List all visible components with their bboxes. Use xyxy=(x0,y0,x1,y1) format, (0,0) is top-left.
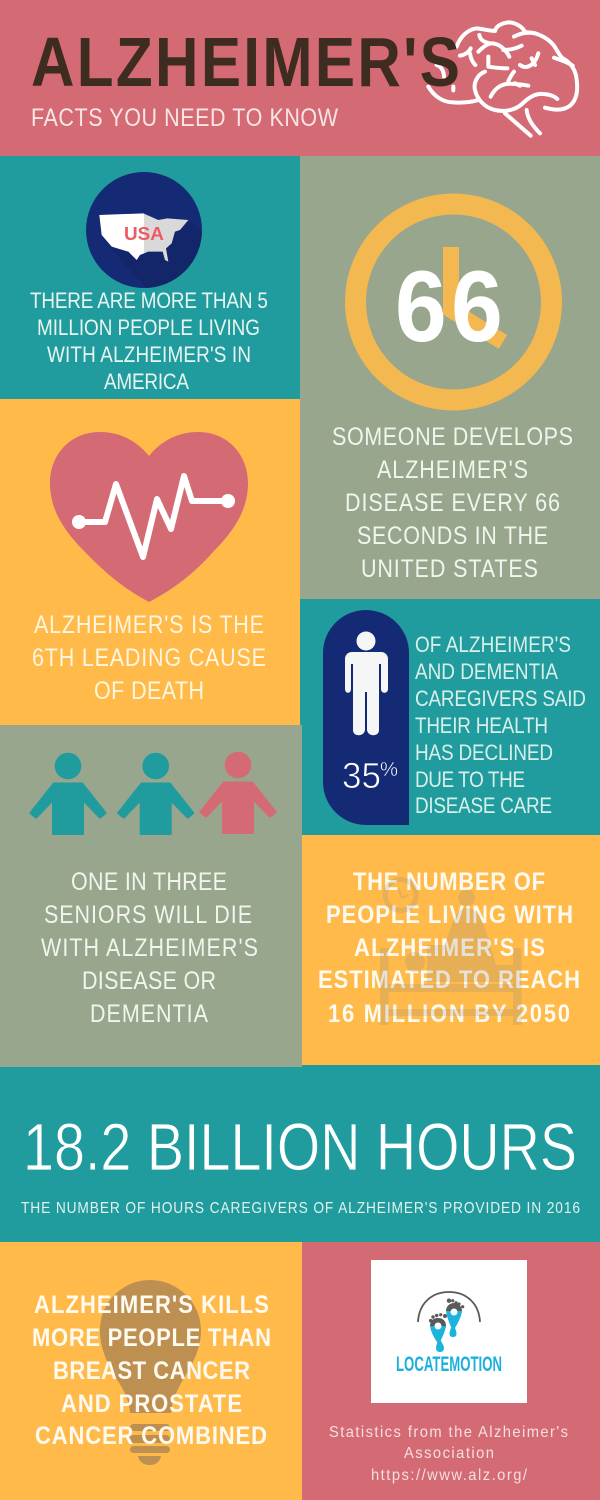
panel: caregivers health xyxy=(300,599,600,836)
text: one in three seniors: WITH ALZHEIMER'S xyxy=(41,933,258,961)
text: source note: https://www.alz.org/ xyxy=(371,1466,528,1484)
logo: Locatemotion: LOCATEMOTION xyxy=(396,1353,502,1376)
text: kills more than cancer: MORE PEOPLE THAN xyxy=(32,1324,271,1351)
text: sixteen million by 2050 xyxy=(318,868,580,1027)
icon: light bulb xyxy=(100,1280,201,1465)
text: kills more than cancer: ALZHEIMER'S KILLS xyxy=(34,1291,269,1318)
panel: sixteen million by 2050 xyxy=(302,835,600,1066)
text: five million: MILLION PEOPLE LIVING xyxy=(37,316,260,340)
logo: Locatemotion xyxy=(371,1260,527,1403)
icon: clock with 66 xyxy=(356,204,552,400)
panel: kills more than cancer xyxy=(0,1242,302,1500)
subtitle: FACTS YOU NEED TO KNOW xyxy=(31,103,338,131)
text: sixth leading cause: ALZHEIMER'S IS THE xyxy=(34,610,264,638)
title: ALZHEIMER'S xyxy=(31,23,460,101)
text: caregivers health: THEIR HEALTH xyxy=(415,714,548,738)
text: sixth leading cause: OF DEATH xyxy=(94,676,204,704)
text: every 66 seconds: SECONDS IN THE xyxy=(357,521,548,549)
text: every 66 seconds xyxy=(332,422,573,582)
text: kills more than cancer xyxy=(32,1291,271,1449)
text: sixteen million by 2050: PEOPLE LIVING WITH xyxy=(326,901,573,928)
text: source note: Association xyxy=(404,1444,494,1462)
text: kills more than cancer: AND PROSTATE xyxy=(61,1390,242,1417)
text: five million: WITH ALZHEIMER'S IN xyxy=(47,343,251,367)
text: five million: AMERICA xyxy=(104,370,189,394)
panel: sixth leading cause xyxy=(0,399,300,725)
text: caregivers health: AND DEMENTIA xyxy=(415,660,558,684)
capsule with person and 35 percent xyxy=(323,610,409,825)
capsule with person and 35 percent: % xyxy=(380,759,398,781)
text: sixteen million by 2050: ALZHEIMER'S IS xyxy=(354,934,545,961)
text: sixteen million by 2050: THE NUMBER OF xyxy=(353,868,545,895)
text: sixteen million by 2050: ESTIMATED TO REACH xyxy=(318,966,580,993)
text: caregivers health xyxy=(415,633,586,818)
text: one in three seniors: DISEASE OR xyxy=(82,966,216,994)
icon: person xyxy=(345,632,388,735)
icon: USA map in circle xyxy=(86,172,205,290)
text: source note xyxy=(329,1423,568,1484)
stat: 35 percent: 35 xyxy=(342,755,381,796)
text: one in three seniors: ONE IN THREE xyxy=(71,867,227,895)
text: caregivers health: OF ALZHEIMER'S xyxy=(415,633,571,657)
text: sixth leading cause xyxy=(32,610,266,704)
panel: every 66 seconds xyxy=(300,156,600,599)
panel: 18.2 billion hours xyxy=(0,1065,600,1242)
text: five million xyxy=(30,289,268,394)
text: caregivers health: DISEASE CARE xyxy=(415,794,552,818)
text: every 66 seconds: ALZHEIMER'S xyxy=(377,455,528,483)
text: sixth leading cause: 6TH LEADING CAUSE xyxy=(32,643,266,671)
icon: heart with pulse xyxy=(50,432,248,602)
text: hours caption: THE NUMBER OF HOURS CAREGIVERS OF ALZHEIMER'S PROVIDED IN 2016 xyxy=(21,1199,580,1217)
text: every 66 seconds: DISEASE EVERY 66 xyxy=(345,488,560,516)
icon: USA map in circle: USA xyxy=(124,224,164,244)
panel: one in three seniors xyxy=(0,725,302,1067)
panel: five million in America xyxy=(0,156,300,399)
text: kills more than cancer: BREAST CANCER xyxy=(53,1357,250,1384)
text: sixteen million by 2050: 16 MILLION BY 2050 xyxy=(328,1000,570,1027)
panel: header xyxy=(0,0,600,156)
icon: brain xyxy=(428,22,577,136)
text: five million: THERE ARE MORE THAN 5 xyxy=(30,289,268,313)
text: every 66 seconds: UNITED STATES xyxy=(361,554,538,582)
text: caregivers health: DUE TO THE xyxy=(415,768,525,792)
panel: source and logo xyxy=(302,1242,600,1500)
icon: three people xyxy=(31,752,275,834)
text: every 66 seconds: SOMEONE DEVELOPS xyxy=(332,422,573,450)
text: kills more than cancer: CANCER COMBINED xyxy=(35,1422,267,1449)
text: one in three seniors: SENIORS WILL DIE xyxy=(44,900,252,928)
text: caregivers health: HAS DECLINED xyxy=(415,741,553,765)
text: source note: Statistics from the Alzheimer's xyxy=(329,1423,568,1441)
icon: footprint pins xyxy=(429,1298,464,1352)
icon: faint patient in bed xyxy=(380,877,522,1025)
icon: clock with 66: 66 xyxy=(395,249,503,363)
text: one in three seniors xyxy=(41,867,258,1027)
text: one in three seniors: DEMENTIA xyxy=(90,999,208,1027)
text: caregivers health: CAREGIVERS SAID xyxy=(415,687,586,711)
